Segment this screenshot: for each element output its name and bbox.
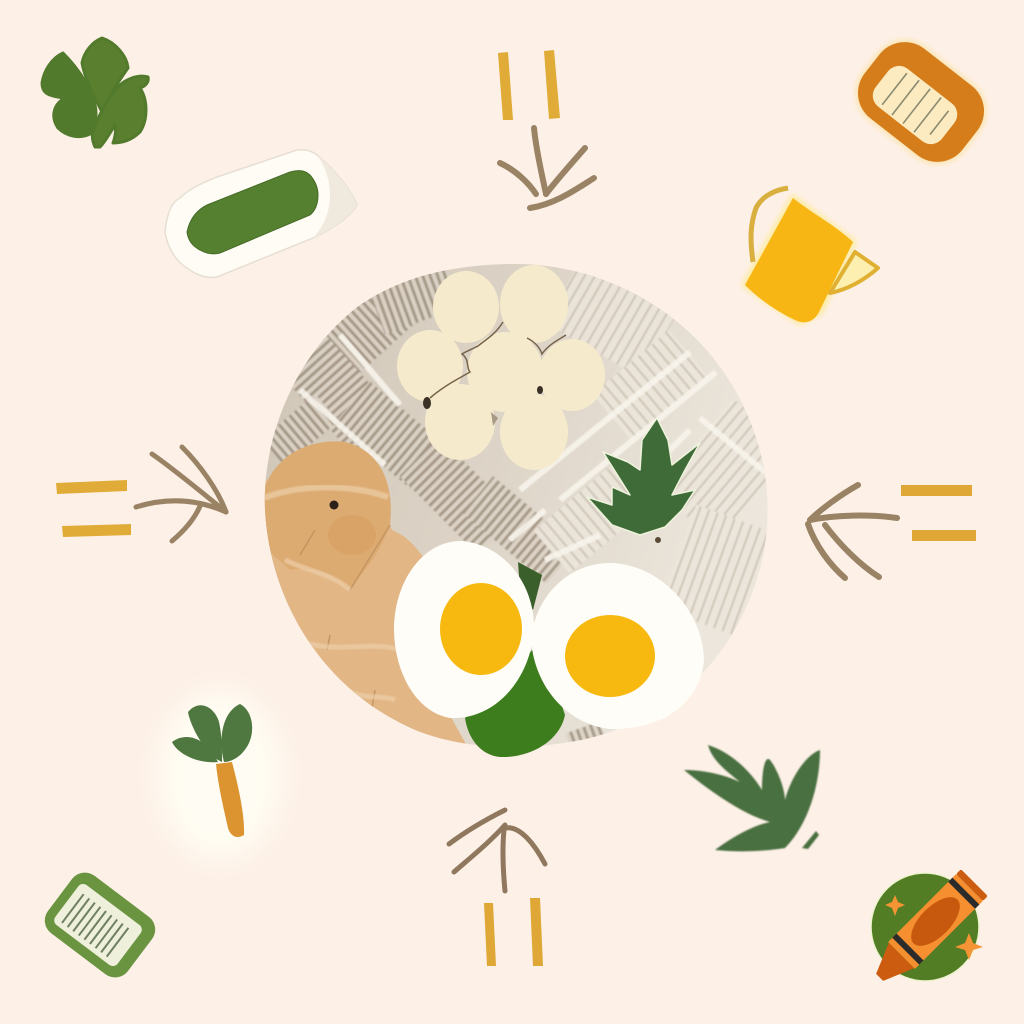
icon: right sticks and sprig <box>808 485 976 578</box>
icon: green pill in white capsule <box>165 150 357 277</box>
panel: round plate <box>262 262 794 749</box>
food: green leaf under eggs <box>465 562 565 757</box>
food: potato pieces <box>397 265 605 470</box>
icon: green herb bottom right <box>684 745 820 851</box>
food: boiled egg right <box>531 563 704 729</box>
icon: top sticks and sprig <box>498 50 594 208</box>
food: green herb on plate <box>587 418 700 543</box>
icon: green rounded box bottom left <box>38 866 162 984</box>
icon: bottom sticks and sprig <box>449 810 545 966</box>
food: boiled egg left <box>394 541 534 718</box>
food: ginger root <box>264 441 466 744</box>
icon: left sticks and sprig <box>56 447 226 541</box>
icon: clover leaf top left <box>42 38 148 147</box>
icon: orange rounded box top right <box>842 26 1000 178</box>
icon: crayon badge <box>866 869 988 991</box>
icon: carrot with leaves <box>158 690 282 860</box>
icon: yellow jug <box>745 188 878 322</box>
